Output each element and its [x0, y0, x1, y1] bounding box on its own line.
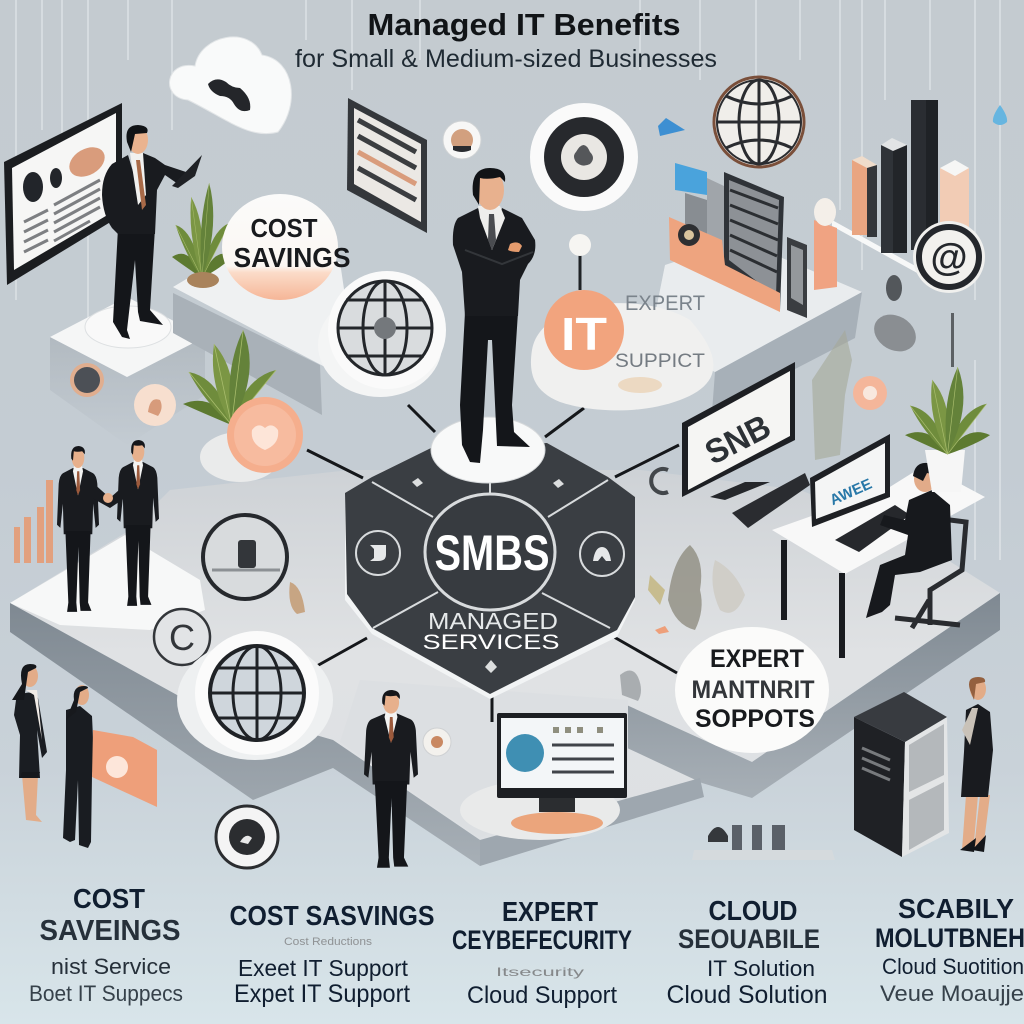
framed panel [347, 98, 427, 233]
figure: desk worker [866, 463, 966, 628]
plant right [905, 367, 990, 492]
cost savings bubble: COST [250, 213, 318, 243]
column: expert cybersecurity: EXPERT [502, 896, 598, 927]
connector lines [307, 405, 679, 722]
globe badge upper left [318, 271, 446, 397]
title: Managed IT Benefits [368, 7, 680, 42]
round photo badge mid left [203, 515, 287, 599]
column: cloud scalable: CLOUD [708, 895, 798, 926]
platform: main floor [10, 470, 1000, 840]
coin badge left middle [200, 397, 303, 482]
target badge lower left [216, 806, 278, 868]
at sign mid left [154, 609, 210, 665]
figure: woman right [960, 677, 993, 852]
small icons left [70, 363, 176, 426]
figure: woman centre left [63, 685, 94, 848]
figure: central businessman [453, 168, 535, 463]
platform: lower band [480, 778, 704, 866]
small rack items [692, 825, 835, 860]
smbs central circle [425, 494, 555, 610]
server tower [854, 692, 949, 857]
bar chart mid left [14, 480, 53, 563]
figure: woman lower left [12, 664, 47, 822]
platform: upper right [650, 240, 862, 412]
column: cost savings: SAVEINGS [40, 915, 180, 947]
column: cost savings two: Exeet IT Support [238, 955, 409, 981]
column: expert cybersecurity [452, 896, 632, 1009]
IT support bubble: SUPPICT [615, 351, 705, 372]
column: expert cybersecurity: Cloud Support [467, 982, 617, 1009]
bar chart top right [832, 100, 969, 274]
hub label: managed: MANAGED [428, 608, 558, 634]
column: scalability: SCABILY [898, 893, 1014, 924]
figure: presenter [102, 125, 202, 339]
cost savings bubble [222, 194, 350, 300]
at-sign badge: @ [930, 237, 968, 279]
IT support bubble: IT [561, 308, 607, 360]
blue drop icon [993, 105, 1007, 125]
column: cost savings: COST [73, 883, 145, 914]
column: scalability: Veue Moaujje [880, 981, 1024, 1006]
plant upper left [172, 183, 232, 288]
column: expert cybersecurity: Itsecurity [496, 965, 584, 979]
badge icon top centre [530, 103, 638, 211]
column: expert cybersecurity: CEYBEFECURITY [452, 925, 632, 955]
presenter pedestal [85, 306, 171, 348]
platform: lower floor patch [340, 680, 628, 838]
hub label: services: SERVICES [422, 631, 560, 654]
hub icon right [580, 532, 624, 576]
platform: side band left [10, 603, 480, 866]
globe badge lower left [177, 631, 333, 760]
column: cloud scalable [666, 895, 828, 1009]
monitor desk right: AWEE [827, 476, 875, 509]
ring icon small [443, 121, 481, 159]
cloud inner icon [208, 79, 250, 111]
platform: upper left [173, 262, 350, 415]
cost savings bubble: SAVINGS [234, 242, 350, 273]
platform: upper left pedestal [50, 297, 205, 445]
scattered ornaments upper right [812, 275, 954, 460]
hub small marks [412, 478, 564, 673]
at sign mid left: C [169, 617, 195, 658]
figure: handshake left [57, 446, 99, 612]
monitor upper right: SNB [699, 408, 777, 472]
C icon mid right [651, 469, 668, 493]
figure: lower centre businessman [364, 690, 418, 868]
IT support bubble: EXPERT [625, 292, 705, 315]
monitor desk right [810, 434, 910, 552]
globe icon top right [714, 77, 804, 167]
scattered ornaments middle right [620, 545, 745, 701]
smbs central circle: SMBS [434, 525, 550, 581]
SMBs hexagon hub [345, 443, 635, 699]
ornament mid left [289, 582, 305, 614]
column: cost savings two: Cost Reductions [284, 936, 373, 948]
expert support bubble: SOPPOTS [695, 705, 815, 733]
column: cost savings: Boet IT Suppecs [29, 981, 183, 1006]
platform: side band right [620, 593, 1000, 798]
expert support bubble [675, 627, 829, 753]
title [295, 7, 717, 73]
server and document cluster [669, 163, 837, 318]
lower monitor [460, 713, 627, 840]
presentation board [4, 103, 122, 285]
blue shard icon [658, 118, 685, 136]
column: cloud scalable: SEOUABILE [678, 924, 820, 954]
column: cost savings two: COST SASVINGS [230, 900, 434, 931]
central pedestal [431, 417, 545, 483]
plant left middle [183, 330, 280, 425]
figure: handshake right [117, 440, 159, 606]
column: cloud scalable: Cloud Solution [666, 981, 828, 1009]
small badge centre [423, 728, 451, 756]
expert support bubble: EXPERT [710, 645, 804, 673]
monitor upper right [682, 362, 810, 528]
column: cost savings two: Expet IT Support [234, 980, 410, 1008]
expert support bubble: MANTNRIT [692, 676, 814, 704]
handshake arms [92, 482, 128, 508]
column: scalability [875, 893, 1024, 1006]
at-sign badge [913, 221, 985, 293]
cloud icon [170, 37, 291, 134]
title: for Small & Medium-sized Businesses [295, 45, 717, 73]
column: cost savings [29, 883, 183, 1006]
column: cloud scalable: IT Solution [707, 956, 815, 981]
hub icon left [356, 531, 400, 575]
IT support bubble [531, 234, 713, 410]
column: cost savings two [230, 900, 434, 1008]
platform: handshake top [10, 535, 205, 630]
column: cost savings: nist Service [51, 954, 171, 979]
orange folder [92, 730, 157, 807]
desk [772, 465, 985, 658]
